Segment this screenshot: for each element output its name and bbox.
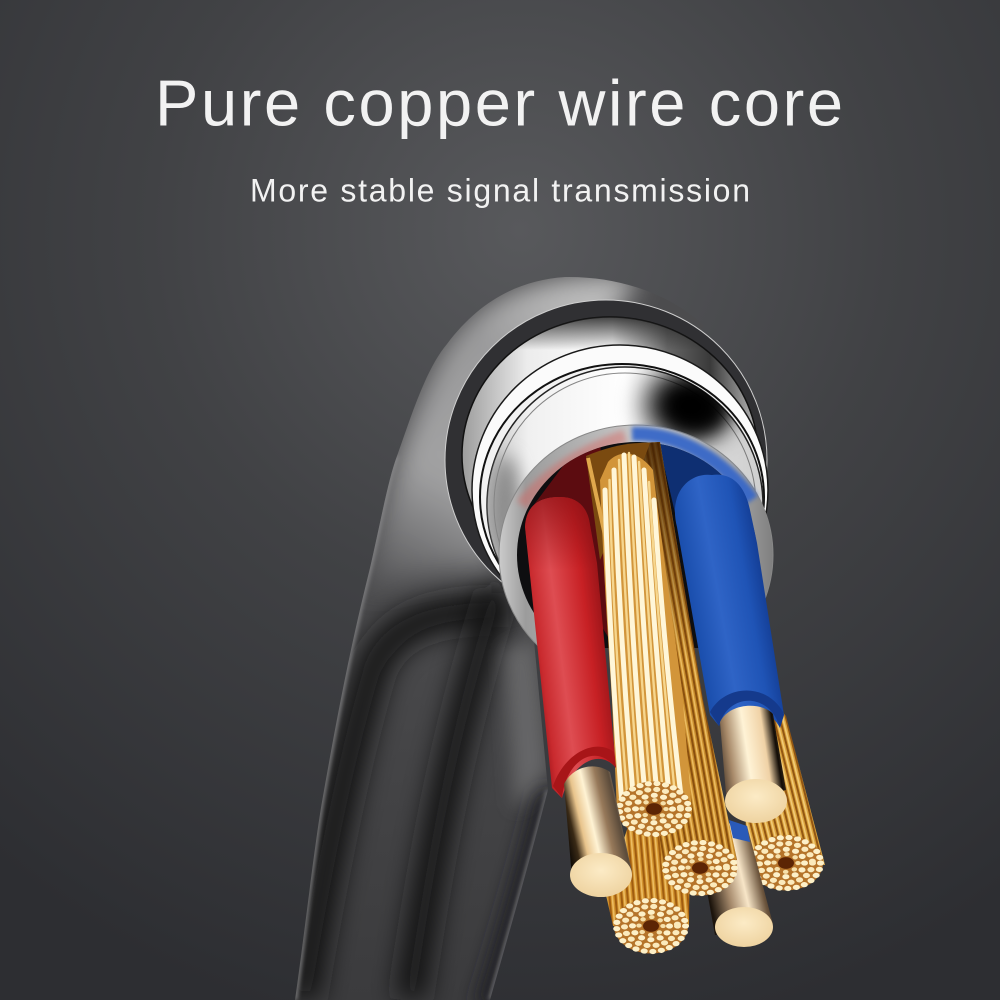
dark collar ring [444, 300, 768, 582]
title: Pure copper wire core [155, 66, 843, 140]
blue insulated wire with copper conductor [675, 475, 787, 823]
shadowed wire roots inside opening [534, 444, 755, 636]
front silver ring [498, 424, 774, 648]
rear gold strand bundle, lower left [606, 820, 690, 954]
rear gold strand bundle, right [745, 700, 825, 890]
lower copper conductor [705, 820, 773, 947]
red insulated wire with copper conductor [525, 497, 632, 897]
subtitle: More stable signal transmission [250, 172, 750, 208]
cable sheath [295, 277, 646, 1000]
illustration: cable with exposed copper wires [295, 274, 825, 1000]
silver connector bands [461, 316, 769, 576]
middle gold strand bundle [640, 442, 737, 896]
front gold strand bundle [586, 443, 692, 836]
